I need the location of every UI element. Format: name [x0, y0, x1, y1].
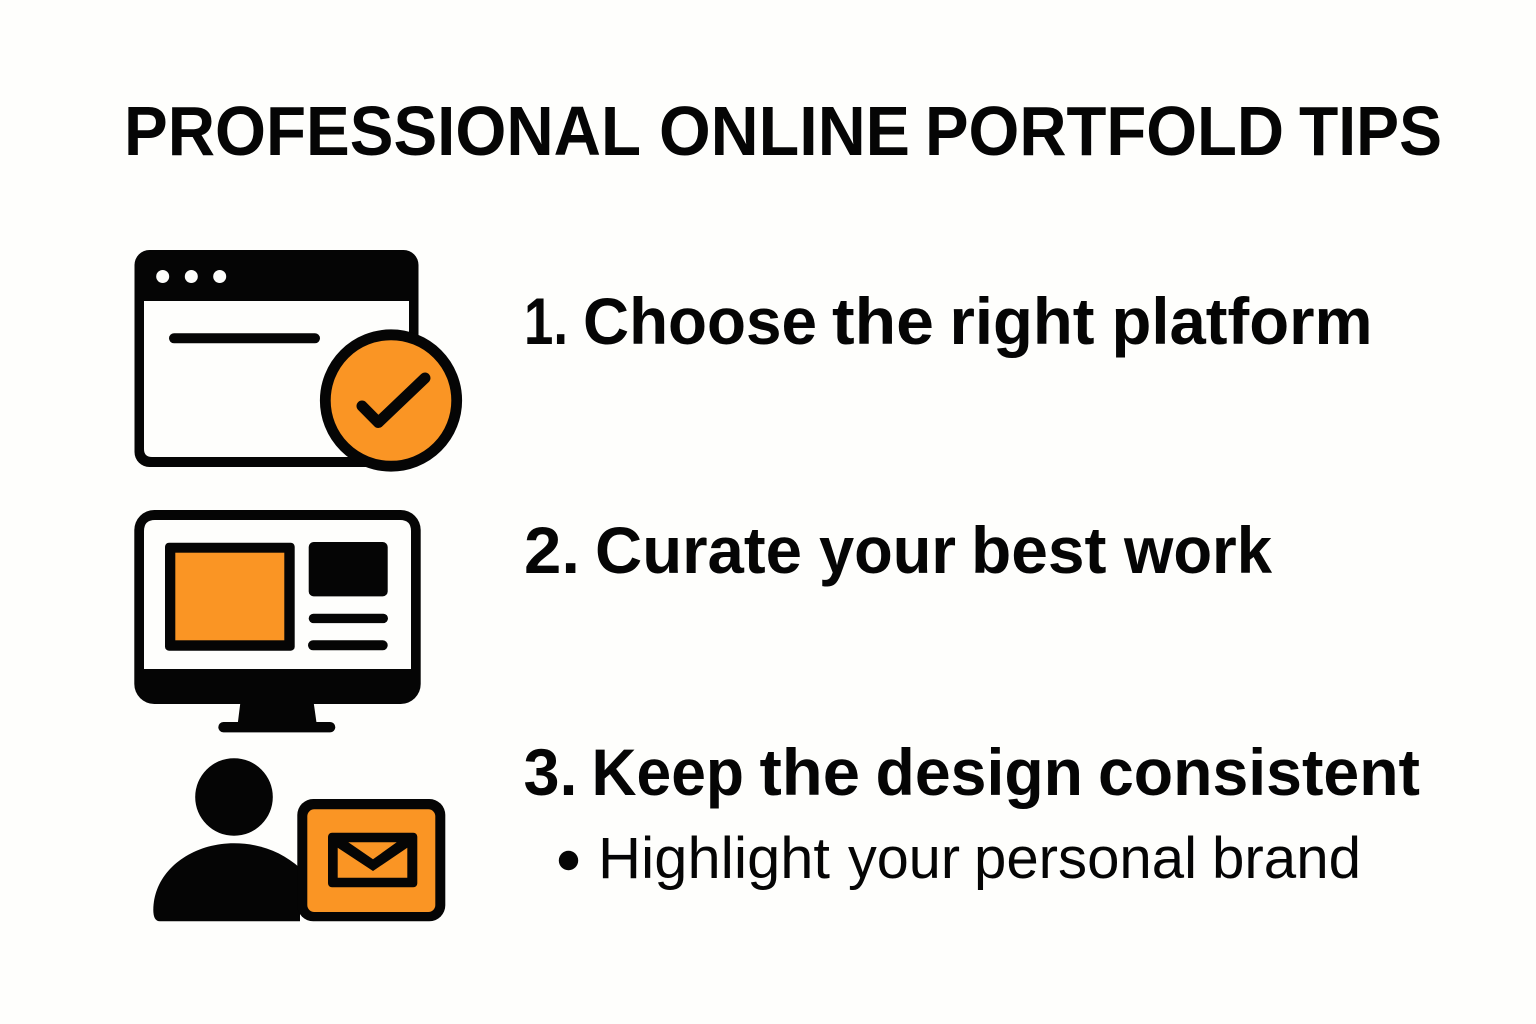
- tip 3 text: [524, 735, 1420, 809]
- sub-bullet text: brand: [1212, 826, 1361, 891]
- tip 2 text: your: [819, 513, 956, 587]
- tip 3 text: consistent: [1098, 735, 1420, 809]
- tip 1 text: the: [832, 284, 934, 358]
- tip 2 text: work: [1123, 513, 1272, 587]
- tip 1 text: platform: [1112, 284, 1372, 358]
- sub-bullet text: Highlight: [598, 826, 830, 891]
- tip 3 text: design: [876, 735, 1083, 809]
- tip 2 text: [524, 513, 1272, 587]
- title: PROFESSIONAL: [124, 92, 641, 170]
- icon: person with envelope card: [153, 758, 445, 921]
- icon: browser window with check badge: [134, 250, 457, 467]
- tip 3 text: 3.: [524, 735, 578, 809]
- title: PORTFOLD: [925, 92, 1284, 170]
- tip 2 text: Curate: [595, 513, 802, 587]
- tip 2 text: best: [971, 513, 1107, 587]
- bullet point: [559, 851, 578, 870]
- tip 2 text: 2.: [524, 513, 580, 587]
- icon: desktop monitor with portfolio layout: [134, 510, 421, 732]
- tip 1 text: [524, 284, 1372, 358]
- tip 1 text: Choose: [583, 284, 817, 358]
- tip 3 text: the: [760, 735, 860, 809]
- title: [124, 92, 1442, 170]
- tip 1 text: 1.: [524, 284, 568, 358]
- sub-bullet text: your: [848, 826, 960, 891]
- sub-bullet text: [598, 826, 1361, 891]
- tip 1 text: right: [950, 284, 1095, 358]
- tip 3 text: Keep: [592, 735, 744, 809]
- sub-bullet text: personal: [974, 826, 1197, 891]
- title: ONLINE: [659, 92, 910, 170]
- title: TIPS: [1299, 92, 1442, 170]
